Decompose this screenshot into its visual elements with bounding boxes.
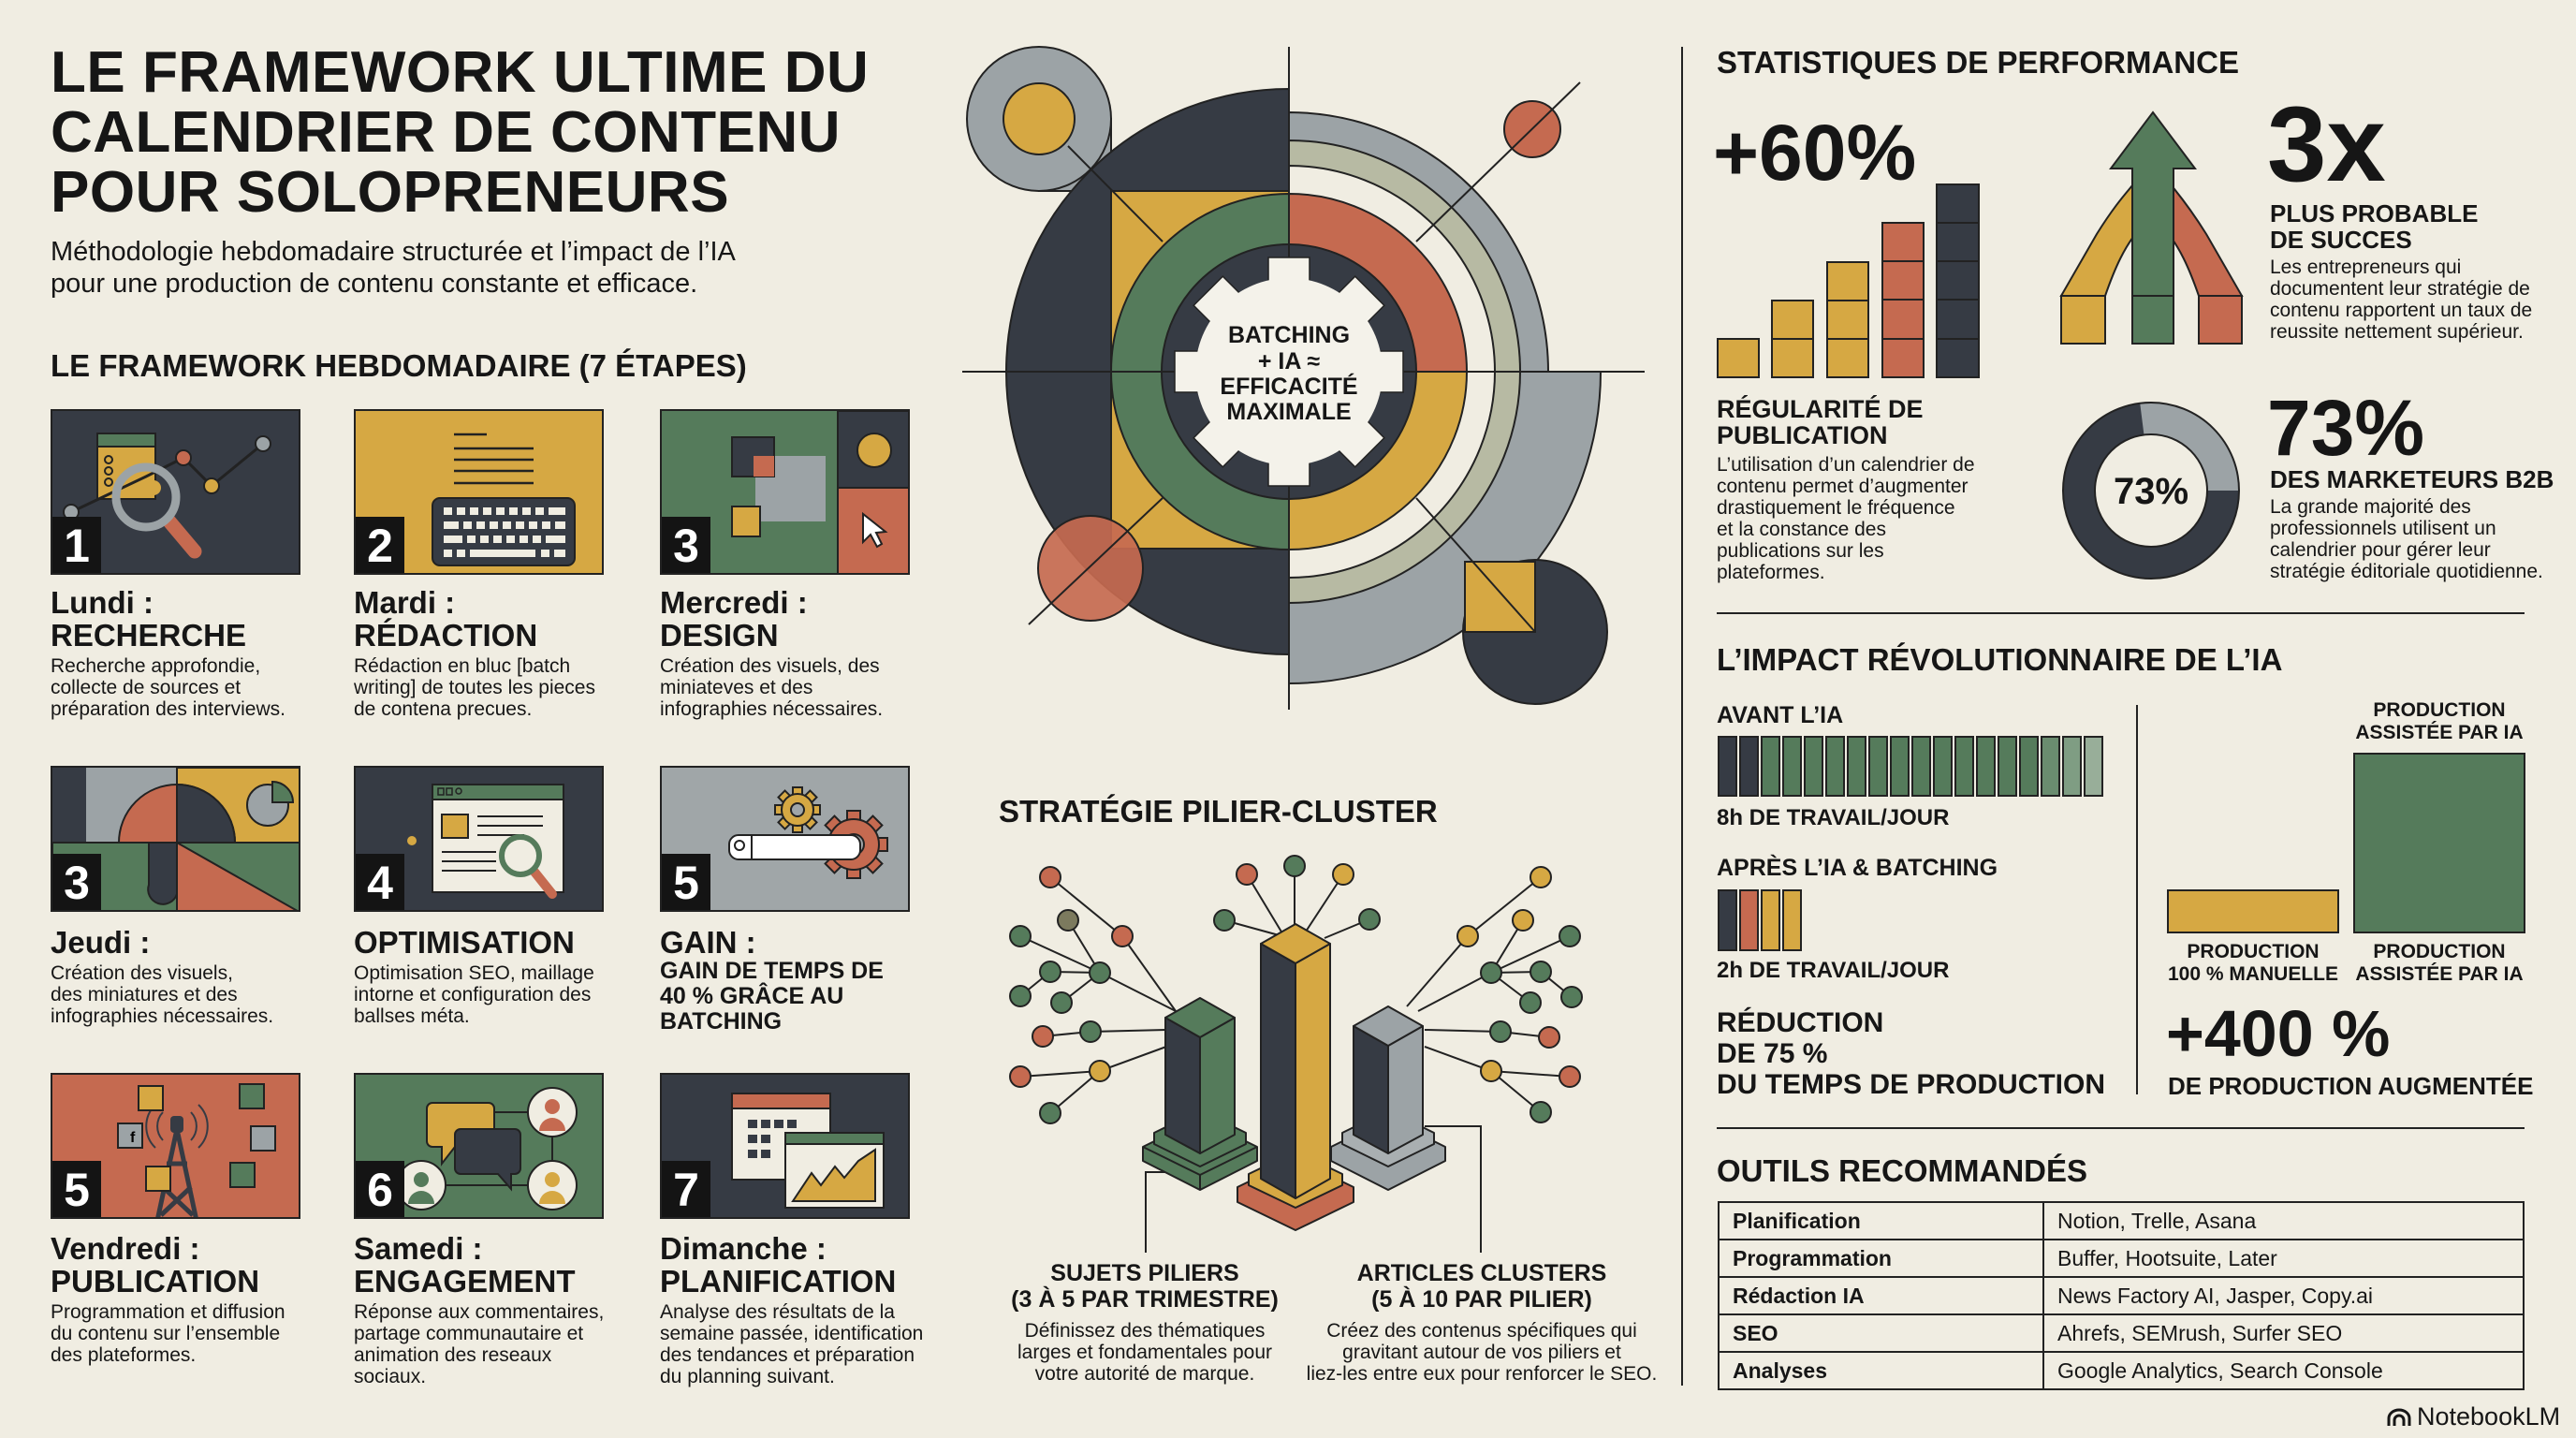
subtitle bbox=[51, 237, 736, 299]
text: Gain bbox=[660, 925, 884, 1034]
text: Mercredi: infographies nécessaires. bbox=[660, 698, 883, 720]
title: POUR SOLOPRENEURS bbox=[51, 160, 729, 225]
text: Optimisation: OPTIMISATION bbox=[354, 925, 575, 960]
text: Vendredi: Programmation et diffusion bbox=[51, 1301, 285, 1323]
text: regularite: PUBLICATION bbox=[1717, 421, 1887, 449]
text: Dimanche: Analyse des résultats de la bbox=[660, 1301, 895, 1323]
text: 3x description: DE SUCCES bbox=[2270, 226, 2412, 254]
text: Gain: BATCHING bbox=[660, 1008, 782, 1034]
text: Samedi: partage communautaire et bbox=[354, 1323, 583, 1344]
card 7: Vendredi: 5 bbox=[64, 1164, 90, 1216]
text: Lundi: Recherche approfondie, bbox=[51, 655, 260, 677]
text: reduction bbox=[1717, 1007, 2105, 1100]
card 8: Samedi bbox=[354, 1073, 604, 1219]
text: Dimanche: des tendances et préparation bbox=[660, 1344, 915, 1366]
card 4: Jeudi: 3 bbox=[64, 857, 90, 909]
nodes bbox=[1010, 856, 1582, 1123]
card 6: Gain: 5 bbox=[673, 857, 699, 909]
text: Dimanche: Dimanche : bbox=[660, 1231, 827, 1266]
text: Samedi: animation des reseaux bbox=[354, 1344, 551, 1366]
text: 73% description: La grande majorité des bbox=[2270, 496, 2471, 518]
logo: NotebookLM: NotebookLM bbox=[2417, 1402, 2560, 1431]
subtitle: Méthodologie hebdomadaire structurée et l’impact de l’IA bbox=[51, 237, 736, 267]
text: gear label: MAXIMALE bbox=[1226, 399, 1352, 425]
text: regularite: plateformes. bbox=[1717, 562, 1825, 583]
text: Mercredi: DESIGN bbox=[660, 618, 779, 653]
text: Dimanche bbox=[660, 1231, 923, 1387]
card 3: Mercredi bbox=[660, 409, 910, 575]
text: reduction: DE 75 % bbox=[1717, 1038, 1827, 1069]
text: regularite: RÉGULARITÉ DE bbox=[1717, 395, 1924, 423]
text: Mercredi: Mercredi : bbox=[660, 585, 808, 620]
text: AI labels left: AVANT L’IA bbox=[1717, 702, 1843, 728]
text: Jeudi: Jeudi : bbox=[51, 925, 150, 960]
text: 3x description bbox=[2270, 199, 2532, 343]
text: Mardi: de contena precues. bbox=[354, 698, 532, 720]
text: Dimanche: semaine passée, identification bbox=[660, 1323, 923, 1344]
heading: AI impact: L’IMPACT RÉVOLUTIONNAIRE DE L’IA bbox=[1717, 642, 2282, 677]
table: tools: Ahrefs, SEMrush, Surfer SEO bbox=[2057, 1320, 2342, 1344]
table: tools: Rédaction IA bbox=[1733, 1283, 1865, 1307]
text: pillar heading: STRATÉGIE PILIER-CLUSTER bbox=[999, 794, 1438, 829]
text: 100 % MANUELLE bbox=[2168, 963, 2338, 985]
card 5: Optimisation: 4 bbox=[367, 857, 393, 909]
text: regularite: contenu permet d’augmenter bbox=[1717, 476, 1968, 497]
stat: +400%: +400 % bbox=[2166, 997, 2390, 1070]
text: 73% description: calendrier pour gérer leur bbox=[2270, 539, 2491, 561]
text: cluster labels bbox=[1307, 1260, 1657, 1385]
text: Gain: 40 % GRÂCE AU bbox=[660, 983, 843, 1009]
table: tools: Buffer, Hootsuite, Later bbox=[2057, 1245, 2277, 1269]
text: ASSISTÉE PAR IA bbox=[2355, 963, 2524, 985]
text: 3x description: contenu rapportent un taux de bbox=[2270, 300, 2532, 321]
text: 73% description bbox=[2270, 465, 2554, 582]
text: Dimanche: du planning suivant. bbox=[660, 1366, 835, 1387]
text: Optimisation: intorne et configuration des bbox=[354, 984, 591, 1005]
text: Jeudi: infographies nécessaires. bbox=[51, 1005, 273, 1027]
text: pillar labels bbox=[1011, 1260, 1279, 1385]
table: tools bbox=[1718, 1201, 2525, 1390]
text: Dimanche: PLANIFICATION bbox=[660, 1264, 896, 1299]
shape: yellow square bbox=[1111, 191, 1289, 549]
card 3: Mercredi: 3 bbox=[673, 520, 699, 572]
heading: tools: OUTILS RECOMMANDÉS bbox=[1717, 1153, 2087, 1188]
text: Mercredi: miniateves et des bbox=[660, 677, 812, 698]
text: Gain: GAIN DE TEMPS DE bbox=[660, 958, 884, 984]
card 1: Lundi bbox=[51, 409, 300, 575]
text: 3x description: PLUS PROBABLE bbox=[2270, 199, 2478, 227]
heading: weekly framework: LE FRAMEWORK HEBDOMADAIRE (7 ÉTAPES) bbox=[51, 348, 747, 383]
shape: bottom-right dark circle bbox=[1463, 560, 1607, 704]
text: Mardi: writing] de toutes les pieces bbox=[354, 677, 595, 698]
chart: before/after bars bbox=[1719, 737, 2525, 950]
text: Vendredi bbox=[51, 1231, 285, 1366]
chart: donut 73% bbox=[2063, 403, 2239, 579]
lines: crosshair and diagonals bbox=[962, 47, 1645, 710]
text: Lundi bbox=[51, 585, 285, 720]
text: 73% description: DES MARKETEURS B2B bbox=[2270, 465, 2554, 493]
text: Optimisation: ballses méta. bbox=[354, 1005, 470, 1027]
text: production labels bbox=[2355, 699, 2524, 743]
text: DE PRODUCTION AUGMENTÉE bbox=[2168, 1072, 2533, 1100]
card 2: Mardi: 2 bbox=[367, 520, 393, 572]
text: Jeudi: des miniatures et des bbox=[51, 984, 238, 1005]
shape: bottom-left terracotta circle bbox=[1038, 516, 1143, 621]
text: Lundi: collecte de sources et bbox=[51, 677, 241, 698]
card 7: Vendredi bbox=[51, 1073, 300, 1219]
text: pillar labels: votre autorité de marque. bbox=[1035, 1363, 1254, 1385]
text: Gain: GAIN : bbox=[660, 925, 756, 960]
card 6: Gain bbox=[660, 766, 910, 912]
title: CALENDRIER DE CONTENU bbox=[51, 100, 841, 165]
text: APRÈS L’IA & BATCHING bbox=[1717, 855, 1998, 881]
shape: right gray arcs bbox=[1289, 112, 1601, 683]
text: Mardi: RÉDACTION bbox=[354, 618, 537, 653]
table: tools: Programmation bbox=[1733, 1245, 1892, 1269]
table: tools: News Factory AI, Jasper, Copy.ai bbox=[2057, 1283, 2373, 1307]
stat: +60%: +60% bbox=[1713, 109, 1916, 197]
text: Mardi bbox=[354, 585, 595, 720]
table: tools: Analyses bbox=[1733, 1357, 1827, 1382]
text: regularite: drastiquement le fréquence bbox=[1717, 497, 1954, 519]
card 7: Vendredi: f bbox=[130, 1130, 136, 1146]
table: tools: Notion, Trelle, Asana bbox=[2057, 1208, 2256, 1232]
stat chart: stacked squares bbox=[1718, 184, 1979, 377]
card 2: Mardi bbox=[354, 409, 604, 575]
table: tools: SEO bbox=[1733, 1320, 1778, 1344]
card 9: Dimanche bbox=[660, 1073, 910, 1219]
divider bbox=[1681, 47, 1683, 1386]
text: Lundi: préparation des interviews. bbox=[51, 698, 285, 720]
text: 8h DE TRAVAIL/JOUR bbox=[1717, 805, 1949, 830]
text: pillar labels: SUJETS PILIERS bbox=[1050, 1260, 1239, 1286]
text: production labels: ASSISTÉE PAR IA bbox=[2355, 722, 2524, 743]
stat: 3x: 3x bbox=[2267, 85, 2386, 204]
text: 73% description: professionnels utilisent un bbox=[2270, 518, 2496, 539]
text: PRODUCTION bbox=[2187, 941, 2320, 962]
shape: top-right terracotta circle bbox=[1504, 101, 1560, 157]
text: production labels: PRODUCTION bbox=[2373, 699, 2506, 721]
table: tools: Google Analytics, Search Console bbox=[2057, 1357, 2383, 1382]
text: cluster labels: liez-les entre eux pour renforcer le SEO. bbox=[1307, 1363, 1657, 1385]
icon: white gear bbox=[1175, 257, 1403, 486]
subtitle: pour une production de contenu constante et efficace. bbox=[51, 269, 697, 299]
text: Jeudi bbox=[51, 925, 273, 1027]
text: cluster labels: (5 À 10 PAR PILIER) bbox=[1371, 1286, 1592, 1313]
heading: stats: STATISTIQUES DE PERFORMANCE bbox=[1717, 45, 2239, 80]
card 1: Lundi: 1 bbox=[64, 520, 90, 572]
text: reduction: RÉDUCTION bbox=[1717, 1007, 1883, 1038]
shape: dark left half disc bbox=[1006, 89, 1289, 654]
text: Samedi: ENGAGEMENT bbox=[354, 1264, 576, 1299]
text: Jeudi: Création des visuels, bbox=[51, 962, 233, 984]
text: Mardi: Mardi : bbox=[354, 585, 455, 620]
text: pillar labels: Définissez des thématiques bbox=[1025, 1320, 1265, 1342]
text: Mardi: Rédaction en bluc [batch bbox=[354, 655, 570, 677]
text: Optimisation bbox=[354, 925, 594, 1027]
text: Mercredi bbox=[660, 585, 883, 720]
text: Vendredi: PUBLICATION bbox=[51, 1264, 259, 1299]
stat: 73%: 73% bbox=[2267, 384, 2424, 472]
text: PRODUCTION bbox=[2373, 941, 2506, 962]
edges bbox=[1020, 866, 1572, 1253]
text: Vendredi: des plateformes. bbox=[51, 1344, 196, 1366]
title: LE FRAMEWORK ULTIME DU bbox=[51, 40, 869, 105]
text: Samedi bbox=[354, 1231, 604, 1387]
text: pillar labels: larges et fondamentales pour bbox=[1017, 1342, 1272, 1363]
text: gear label bbox=[1220, 322, 1358, 425]
text: regularite: publications sur les bbox=[1717, 540, 1884, 562]
text: Samedi: Réponse aux commentaires, bbox=[354, 1301, 604, 1323]
text: Vendredi: du contenu sur l’ensemble bbox=[51, 1323, 280, 1344]
text: Lundi: RECHERCHE bbox=[51, 618, 246, 653]
text: pillar labels: (3 À 5 PAR TRIMESTRE) bbox=[1011, 1286, 1279, 1313]
text: Mercredi: Création des visuels, des bbox=[660, 655, 880, 677]
ring: colored quadrants bbox=[1111, 194, 1467, 550]
text: 2h DE TRAVAIL/JOUR bbox=[1717, 958, 1949, 983]
text: Samedi: Samedi : bbox=[354, 1231, 483, 1266]
card 4: Jeudi bbox=[51, 766, 300, 912]
card 8: Samedi: 6 bbox=[367, 1164, 393, 1216]
text: cluster labels: Créez des contenus spécifiques qui bbox=[1326, 1320, 1637, 1342]
text: cluster labels: gravitant autour de vos piliers et bbox=[1342, 1342, 1621, 1363]
text: 73% description: stratégie éditoriale quotidienne. bbox=[2270, 561, 2543, 582]
card 5: Optimisation bbox=[354, 766, 604, 912]
text: reduction: DU TEMPS DE PRODUCTION bbox=[1717, 1069, 2105, 1100]
title bbox=[51, 40, 869, 225]
card 9: Dimanche: 7 bbox=[673, 1164, 699, 1216]
pillars bbox=[1143, 924, 1445, 1230]
text: Optimisation: Optimisation SEO, maillage bbox=[354, 962, 594, 984]
text: 3x description: reussite nettement supérieur. bbox=[2270, 321, 2524, 343]
text: gear label: + IA ≈ bbox=[1258, 348, 1320, 374]
text: regularite: L’utilisation d’un calendrier de bbox=[1717, 454, 1975, 476]
text: 3x description: Les entrepreneurs qui bbox=[2270, 257, 2461, 278]
text: gear label: BATCHING bbox=[1228, 322, 1350, 348]
text: cluster labels: ARTICLES CLUSTERS bbox=[1357, 1260, 1606, 1286]
text: regularite: et la constance des bbox=[1717, 519, 1886, 540]
icon: converging arrow bbox=[2061, 112, 2242, 344]
center graphic: batching + IA: 73% bbox=[2114, 471, 2188, 512]
text: Lundi: Lundi : bbox=[51, 585, 154, 620]
pillar cluster diagram bbox=[1010, 856, 1582, 1253]
text: 3x description: documentent leur stratégie de bbox=[2270, 278, 2530, 300]
table: tools: Planification bbox=[1733, 1208, 1861, 1232]
text: Samedi: sociaux. bbox=[354, 1366, 426, 1387]
text: gear label: EFFICACITÉ bbox=[1220, 373, 1358, 400]
text: Vendredi: Vendredi : bbox=[51, 1231, 200, 1266]
shape: top-left gray circle bbox=[967, 47, 1111, 191]
text: regularite bbox=[1717, 395, 1975, 583]
